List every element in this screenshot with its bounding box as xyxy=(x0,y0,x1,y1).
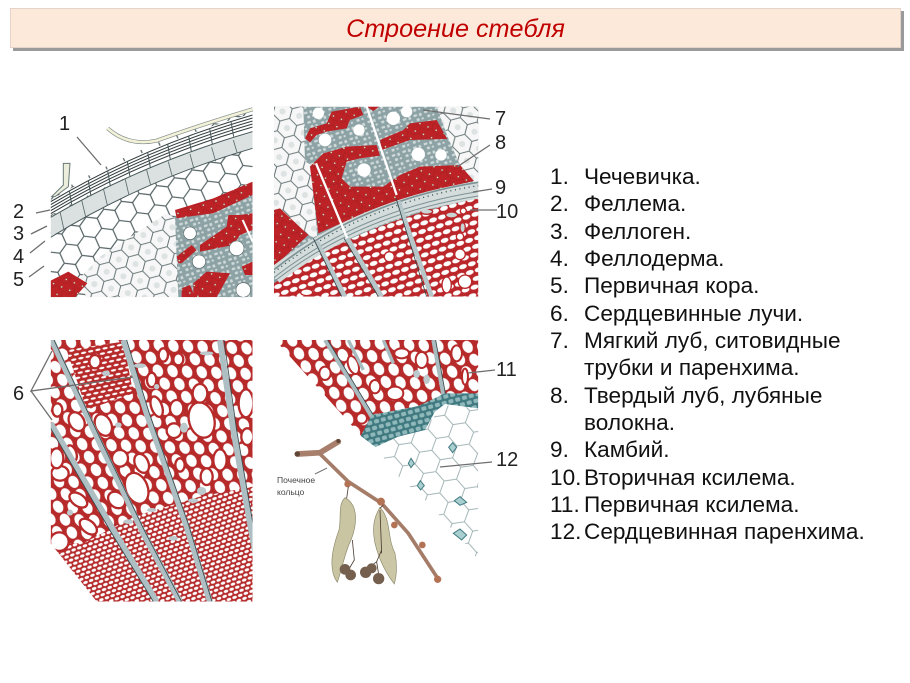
figure numbers: 5 xyxy=(13,269,24,291)
legend list: Камбий. xyxy=(584,437,669,462)
legend list xyxy=(550,164,865,544)
figure numbers: 2 xyxy=(13,201,24,223)
panel: secondary xylem xyxy=(50,340,259,603)
legend list: Сердцевинные лучи. xyxy=(584,301,803,326)
legend list: 9. xyxy=(550,437,569,462)
figure numbers: 6 xyxy=(13,383,24,405)
phloem fibres red xyxy=(175,182,253,218)
legend list: Первичная кора. xyxy=(584,273,759,298)
cortex cells right xyxy=(437,107,478,182)
legend list: трубки и паренхима. xyxy=(584,355,800,380)
legend list: 2. xyxy=(550,191,569,216)
figure numbers xyxy=(13,108,518,471)
panel: cork and cortex xyxy=(51,108,253,297)
legend list: 8. xyxy=(550,383,569,408)
small late wood cells xyxy=(51,487,253,602)
panel: phloem and cambium xyxy=(274,106,478,297)
figure numbers: 7 xyxy=(495,108,506,130)
fruits xyxy=(340,563,384,584)
figure numbers: 10 xyxy=(496,201,518,223)
title xyxy=(10,8,901,48)
pale cortex cells xyxy=(78,213,178,297)
legend list: 5. xyxy=(550,273,569,298)
linden twig xyxy=(295,439,441,584)
xylem red xyxy=(275,340,478,437)
figure numbers: 4 xyxy=(13,246,24,268)
pith cells xyxy=(375,405,478,563)
legend list: 10. xyxy=(550,465,581,490)
hard bast fibres xyxy=(274,107,474,267)
legend list: Феллоген. xyxy=(584,219,691,244)
legend list: 1. xyxy=(550,164,569,189)
rays xyxy=(325,340,446,417)
legend list: Феллодерма. xyxy=(584,246,724,271)
figure numbers: 3 xyxy=(13,223,24,245)
leader lines xyxy=(29,110,497,467)
figure numbers: 8 xyxy=(495,132,506,154)
bracts xyxy=(332,498,356,582)
figure numbers: 11 xyxy=(496,359,517,381)
pith crystal cells xyxy=(408,443,467,540)
label: Почечное кольцо: кольцо xyxy=(277,487,305,497)
phloem region xyxy=(175,187,253,297)
phellem and phelloderm layers xyxy=(51,113,253,237)
legend list: 6. xyxy=(550,301,569,326)
flat cells xyxy=(67,342,133,410)
legend list: волокна. xyxy=(584,410,675,435)
cambium band xyxy=(274,182,478,282)
legend list: Твердый луб, лубяные xyxy=(584,383,822,408)
large vessels xyxy=(50,348,253,551)
legend list: 12. xyxy=(550,519,581,544)
medullary rays xyxy=(316,107,397,238)
label: Почечное кольцо xyxy=(277,468,327,497)
panel: pith and primary xylem xyxy=(275,340,478,584)
legend list: Чечевичка. xyxy=(584,164,701,189)
legend list: 11. xyxy=(550,492,580,517)
legend list: 7. xyxy=(550,328,569,353)
legend list: Феллема. xyxy=(584,191,686,216)
legend list: Вторичная ксилема. xyxy=(584,465,796,490)
legend list: Мягкий луб, ситовидные xyxy=(584,328,841,353)
cortex cells left xyxy=(274,107,317,238)
figure numbers: 1 xyxy=(59,113,70,135)
legend list: Первичная ксилема. xyxy=(584,492,800,517)
figure numbers: 12 xyxy=(496,449,518,471)
legend list: 3. xyxy=(550,219,569,244)
medullary rays xyxy=(51,340,259,602)
figure numbers: 9 xyxy=(495,177,506,199)
title: Строение стебля xyxy=(346,15,565,43)
teal primary xylem band xyxy=(360,393,478,447)
lower wood xyxy=(274,198,478,297)
legend list: Сердцевинная паренхима. xyxy=(584,519,865,544)
label: Почечное кольцо: Почечное xyxy=(277,475,315,485)
bark flaps xyxy=(108,109,253,142)
large sieve tubes xyxy=(313,106,447,177)
illustration xyxy=(13,106,518,602)
legend list: 4. xyxy=(550,246,569,271)
